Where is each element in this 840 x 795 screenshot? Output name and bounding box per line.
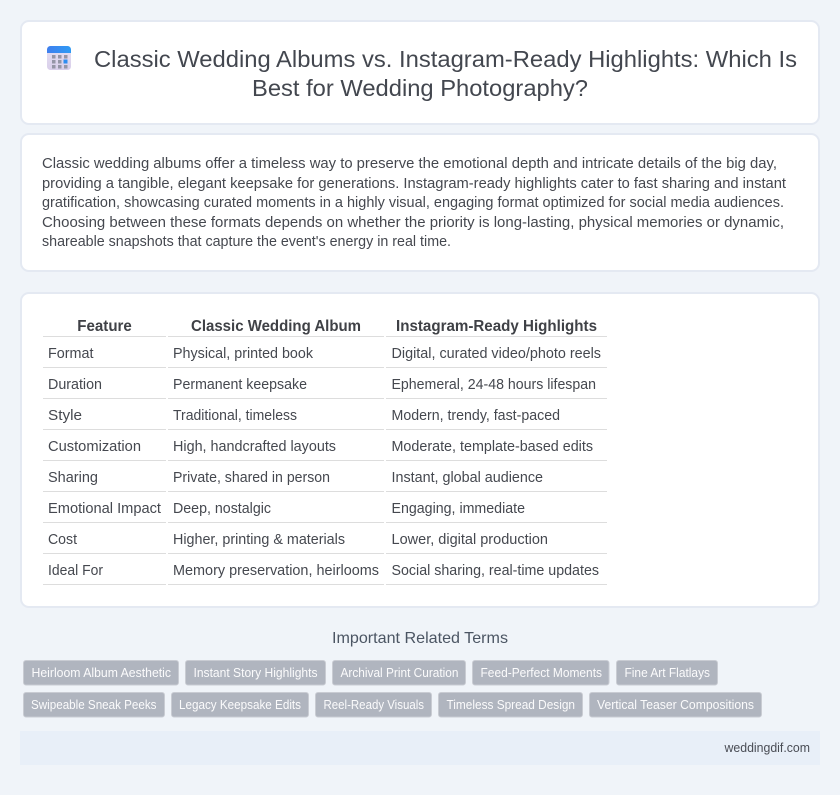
table row: format bbox=[48, 346, 601, 362]
tag bbox=[438, 692, 582, 717]
icon: calendar bbox=[47, 46, 71, 70]
text block: introduction paragraph: shareable snapshots that capture the event's energy in real time. bbox=[42, 234, 451, 250]
text block: introduction paragraph: gratification, showcasing curated moments in a highly visual, engaging format optimized for social media audiences. bbox=[42, 195, 784, 211]
table header: Instagram-Ready Highlights bbox=[396, 318, 597, 335]
panel: title card bbox=[21, 21, 819, 124]
tag: Feed-Perfect Moments bbox=[480, 666, 602, 680]
title: Classic Wedding Albums vs. Instagram-Ready Highlights: Which Is bbox=[94, 46, 797, 72]
text block: introduction paragraph: providing a tangible, elegant keepsake for generations. Instagram-ready highlights cater to fast sharing and instant bbox=[42, 176, 786, 192]
tag bbox=[616, 660, 718, 685]
table row: duration: Permanent keepsake bbox=[173, 377, 307, 393]
panel: introduction bbox=[21, 134, 819, 271]
table row: format: Digital, curated video/photo reels bbox=[392, 346, 601, 362]
table row: duration: Duration bbox=[48, 377, 102, 393]
heading: important related terms: Important Related Terms bbox=[332, 630, 508, 647]
title: Best for Wedding Photography? bbox=[252, 75, 588, 101]
tag: Vertical Teaser Compositions bbox=[597, 698, 754, 712]
tag bbox=[590, 692, 762, 717]
tag: Archival Print Curation bbox=[340, 666, 459, 680]
tag bbox=[172, 692, 308, 717]
table row: ideal for: Memory preservation, heirlooms bbox=[173, 563, 379, 579]
tag bbox=[24, 660, 178, 685]
tag bbox=[316, 692, 432, 717]
table row: cost bbox=[48, 532, 548, 548]
table header: Classic Wedding Album bbox=[191, 318, 361, 335]
table row: style: Traditional, timeless bbox=[173, 408, 297, 424]
tag list: related terms bbox=[24, 660, 762, 717]
table row: emotional impact bbox=[48, 501, 525, 517]
table row: cost: Lower, digital production bbox=[392, 532, 548, 548]
table row: format: Physical, printed book bbox=[173, 346, 314, 362]
table row: format: Format bbox=[48, 346, 94, 362]
table row: customization: Customization bbox=[48, 439, 141, 455]
tag: Swipeable Sneak Peeks bbox=[31, 698, 156, 712]
text block: introduction paragraph: Choosing between these formats depends on whether the priority is long-lasting, physical memories or dynamic, bbox=[42, 215, 784, 231]
table row: emotional impact: Deep, nostalgic bbox=[173, 501, 271, 517]
table row: ideal for bbox=[48, 563, 599, 579]
table row: sharing: Private, shared in person bbox=[173, 470, 330, 486]
table row: customization: Moderate, template-based edits bbox=[392, 439, 593, 455]
tag: Heirloom Album Aesthetic bbox=[32, 666, 171, 680]
tag: Fine Art Flatlays bbox=[624, 666, 710, 680]
table row: ideal for: Social sharing, real-time updates bbox=[392, 563, 599, 579]
table row: emotional impact: Engaging, immediate bbox=[392, 501, 525, 517]
table row: style: Modern, trendy, fast-paced bbox=[392, 408, 560, 424]
table row: style: Style bbox=[48, 408, 82, 424]
tag: Instant Story Highlights bbox=[194, 666, 318, 680]
panel: comparison table bbox=[21, 293, 819, 607]
title bbox=[94, 46, 797, 101]
table row: duration: Ephemeral, 24-48 hours lifespan bbox=[392, 377, 596, 393]
tag: Timeless Spread Design bbox=[446, 698, 575, 712]
table row: duration bbox=[48, 377, 596, 393]
table row: ideal for: Ideal For bbox=[48, 563, 103, 579]
table row: cost: Cost bbox=[48, 532, 77, 548]
table header: Feature bbox=[77, 318, 132, 335]
tag bbox=[24, 692, 164, 717]
tag: Legacy Keepsake Edits bbox=[179, 698, 301, 712]
table row: style bbox=[48, 408, 560, 424]
table row: emotional impact: Emotional Impact bbox=[48, 501, 161, 517]
text block: introduction paragraph bbox=[42, 156, 786, 250]
table row: customization bbox=[48, 439, 593, 455]
text block: introduction paragraph: Classic wedding albums offer a timeless way to preserve the emotional depth and intricate details of the big day, bbox=[42, 156, 777, 172]
table row: sharing: Instant, global audience bbox=[392, 470, 543, 486]
table header bbox=[77, 318, 597, 335]
tag bbox=[472, 660, 609, 685]
table row: sharing: Sharing bbox=[48, 470, 98, 486]
table row: customization: High, handcrafted layouts bbox=[173, 439, 336, 455]
table row: sharing bbox=[48, 470, 543, 486]
tag bbox=[332, 660, 466, 685]
table row: cost: Higher, printing & materials bbox=[173, 532, 345, 548]
tag: Reel-Ready Visuals bbox=[324, 698, 424, 712]
tag bbox=[186, 660, 326, 685]
footer bbox=[20, 731, 820, 765]
footer source: weddingdif.com bbox=[724, 741, 810, 755]
